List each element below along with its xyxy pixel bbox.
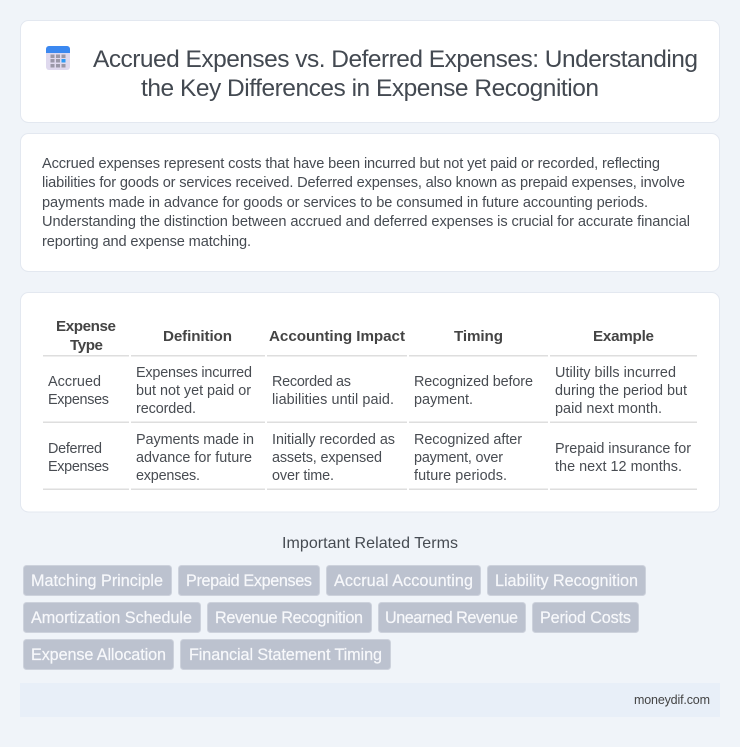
heading: important related terms: Important Related Terms [282, 535, 458, 552]
table row: accrued expenses: Recorded as [272, 374, 351, 390]
title: the Key Differences in Expense Recognition [141, 75, 599, 102]
table row: accrued expenses: payment. [414, 392, 473, 408]
table row: accrued expenses: Utility bills incurred [555, 365, 676, 381]
tags: related terms: Expense Allocation [31, 646, 166, 664]
table row: deferred expenses: over time. [272, 468, 334, 484]
table row: accrued expenses: paid next month. [555, 401, 662, 417]
table row: accrued expenses: but not yet paid or [136, 383, 251, 399]
table header: Example [593, 328, 654, 345]
tags: related terms: Financial Statement Timing [189, 646, 382, 664]
panel: title card [20, 20, 720, 122]
panel: introduction [20, 134, 720, 272]
text block: introduction paragraph [42, 156, 690, 250]
table row: deferred expenses: Prepaid insurance for [555, 441, 691, 457]
table header [43, 318, 697, 356]
text block: introduction paragraph: Accrued expenses represent costs that have been incurred but not yet paid or recorded, reflecting [42, 156, 660, 172]
title: Accrued Expenses vs. Deferred Expenses: Understanding [93, 46, 698, 73]
table row: deferred expenses: Recognized after [414, 432, 522, 448]
table row: deferred expenses: Payments made in [136, 432, 254, 448]
table row: accrued expenses: Recognized before [414, 374, 533, 390]
table row: deferred expenses: the next 12 months. [555, 459, 682, 475]
footer [20, 683, 720, 717]
title [93, 46, 698, 102]
table row: deferred expenses: expenses. [136, 468, 200, 484]
table row: accrued expenses: Expenses [48, 392, 109, 408]
table header: Timing [454, 328, 503, 345]
table row: deferred expenses: assets, expensed [272, 450, 382, 466]
text block: introduction paragraph: payments made in advance for goods or services to be consumed in future accounting periods. [42, 195, 648, 211]
tags: related terms: Amortization Schedule [31, 609, 192, 627]
table header: Type [70, 337, 103, 354]
footer: moneydif.com [634, 693, 710, 707]
table row: accrued expenses: liabilities until paid. [272, 392, 394, 408]
panel: comparison table [20, 292, 720, 512]
table row: accrued expenses: recorded. [136, 401, 196, 417]
table row: accrued expenses [43, 365, 697, 423]
table row: deferred expenses: advance for future [136, 450, 252, 466]
text block: introduction paragraph: Understanding the distinction between accrued and deferred expenses is crucial for accurate financial [42, 214, 690, 230]
tags: related terms: Prepaid Expenses [186, 572, 312, 590]
tags: related terms: Liability Recognition [495, 572, 638, 590]
table header: Expense [56, 318, 116, 335]
table row: deferred expenses: future periods. [414, 468, 507, 484]
table row: accrued expenses: Accrued [48, 374, 101, 390]
table row: deferred expenses: Deferred [48, 441, 102, 457]
icon: calendar [46, 46, 70, 70]
table row: deferred expenses [43, 432, 697, 490]
tags: related terms: Accrual Accounting [334, 572, 473, 590]
tags: related terms: Revenue Recognition [215, 609, 363, 627]
table row: deferred expenses: Initially recorded as [272, 432, 395, 448]
table header: Definition [163, 328, 232, 345]
tags: related terms: Unearned Revenue [385, 609, 518, 627]
tags: related terms: Matching Principle [31, 572, 163, 590]
tags: related terms: Period Costs [540, 609, 631, 627]
table row: deferred expenses: Expenses [48, 459, 109, 475]
tags: related terms [24, 566, 646, 670]
text block: introduction paragraph: liabilities for goods or services received. Deferred expenses, also known as prepaid expenses, involve [42, 175, 685, 191]
table row: accrued expenses: during the period but [555, 383, 687, 399]
table row: deferred expenses: payment, over [414, 450, 503, 466]
table row: accrued expenses: Expenses incurred [136, 365, 252, 381]
text block: introduction paragraph: reporting and expense matching. [42, 234, 251, 250]
table header: Accounting Impact [269, 328, 405, 345]
